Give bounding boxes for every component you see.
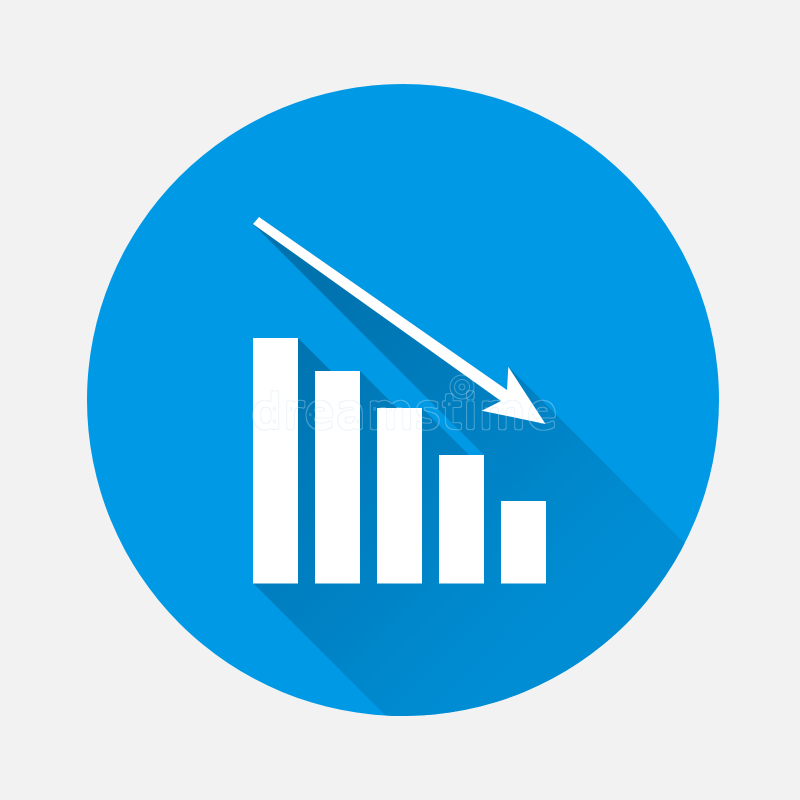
arrow [253, 217, 546, 424]
watermark text: dreamstime [252, 385, 556, 439]
blue circle [87, 84, 719, 716]
bar 2 [315, 371, 360, 584]
bar 5 [501, 501, 546, 584]
bar 1 [253, 338, 298, 584]
bar 4 [439, 455, 484, 584]
watermark logo [450, 375, 474, 399]
long shadow [253, 217, 684, 716]
infographic: declining bar chart icon [87, 84, 719, 716]
bar chart [253, 338, 546, 584]
watermark [252, 375, 556, 439]
bar 3 [377, 408, 422, 584]
